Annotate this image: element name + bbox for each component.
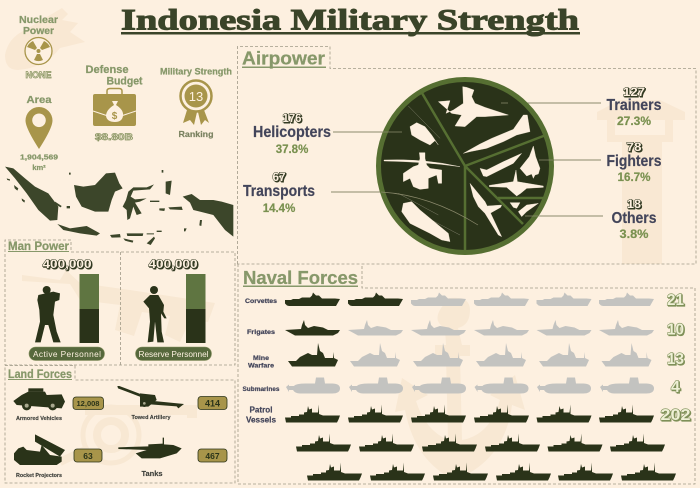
title: Indonesia Military Strength — [121, 4, 579, 36]
stat: others: 18 — [627, 197, 641, 211]
stat: helicopters: Helicopters — [253, 124, 331, 141]
panel: defense budget — [86, 64, 143, 142]
icon: rocket projector — [14, 434, 65, 465]
value badge: rocket projectors — [74, 449, 102, 462]
pie aircraft: silhouettes — [384, 87, 543, 242]
pie arrows — [381, 103, 553, 225]
panel: area: 1,904,569 — [20, 152, 58, 162]
panel: military strength ranking: Ranking — [178, 129, 214, 139]
row: corvettes — [245, 292, 686, 307]
panel: defense budget: Defense — [86, 64, 128, 76]
row: patrol vessels: Patrol — [250, 406, 272, 414]
stat: transports: 14.4% — [263, 203, 295, 215]
leader lines — [331, 103, 603, 216]
value badge: armored vehicles — [73, 397, 104, 410]
row: submarines — [242, 378, 682, 394]
panel: land forces: Towed Artillery — [132, 415, 171, 421]
row: frigates: 10 — [667, 322, 684, 338]
panel: nuclear power: NONE — [26, 70, 52, 80]
icon: medal: 13 — [189, 89, 203, 104]
panel: man power — [5, 239, 235, 365]
panel: man power: 400,000 — [42, 257, 92, 271]
bar: active personnel — [80, 274, 99, 343]
panel: area: km² — [32, 163, 46, 172]
row: patrol vessels: Vessels — [246, 416, 277, 424]
heading: man power: Man Power — [8, 239, 69, 253]
panel: area: Area — [26, 94, 52, 106]
stat: fighters — [606, 140, 662, 184]
stat: transports: Transports — [243, 183, 315, 200]
value badge: towed artillery — [198, 396, 227, 410]
row: frigates: Frigates — [247, 329, 275, 336]
heading: naval forces: Naval Forces — [243, 268, 358, 288]
panel: land forces — [5, 366, 235, 483]
stat: others: Others — [612, 210, 656, 227]
stat: trainers: Trainers — [606, 97, 662, 114]
stat: fighters: Fighters — [606, 153, 662, 170]
stat: fighters: 78 — [626, 140, 642, 154]
stat: transports — [243, 170, 315, 215]
stat: fighters: 16.7% — [618, 172, 650, 184]
row: submarines: 4 — [671, 379, 680, 396]
stat: helicopters: 37.8% — [276, 144, 308, 156]
panel: nuclear power: Power — [23, 26, 54, 37]
panel: nuclear power: Nuclear — [19, 15, 58, 26]
row: corvettes: Corvettes — [245, 298, 277, 305]
icon: towed artillery — [117, 386, 184, 408]
icon: radiation symbol — [25, 38, 52, 64]
bar: reserve personnel — [186, 274, 206, 343]
stat: others: 3.8% — [620, 229, 648, 241]
label: reserve personnel — [136, 347, 212, 360]
panel: land forces: Armored Vehicles — [16, 416, 62, 422]
row: submarines: Submarines — [242, 386, 280, 393]
panel: nuclear power — [19, 15, 58, 80]
watermark: cannon wheel — [60, 407, 192, 463]
stat: others — [612, 197, 656, 241]
row: mine warfare: Mine — [253, 355, 269, 362]
stat: trainers: 127 — [623, 85, 645, 99]
watermark: bomb — [5, 8, 85, 70]
panel: area — [20, 94, 58, 172]
panel: military strength ranking: Military Strength — [160, 66, 232, 76]
row: mine warfare: Warfare — [248, 362, 274, 370]
watermark: rifle — [22, 270, 215, 342]
watermark: control tower — [597, 100, 685, 264]
panel: defense budget: Budget — [106, 76, 143, 88]
value badge: tanks: 467 — [205, 451, 220, 461]
value badge: tanks — [198, 449, 227, 462]
row: patrol vessels: 202 — [660, 407, 691, 424]
pie chart: aircraft fleet — [378, 80, 553, 252]
icon: soldier active — [35, 286, 61, 342]
heading: land forces: Land Forces — [8, 369, 72, 381]
value badge: towed artillery: 414 — [205, 398, 220, 408]
icon: armored vehicle — [13, 388, 65, 410]
label: active personnel — [29, 347, 104, 360]
panel: naval forces — [238, 264, 695, 484]
row: mine warfare: 13 — [667, 351, 684, 368]
row: frigates — [247, 320, 684, 338]
heading: airpower: Airpower — [242, 48, 325, 68]
pie rotor lines — [398, 106, 460, 235]
panel: airpower — [238, 46, 696, 264]
stat: helicopters — [253, 111, 331, 156]
icon: soldier reserve — [143, 286, 167, 342]
panel: military strength ranking — [160, 66, 232, 139]
icon: briefcase with money bag: $ — [112, 111, 118, 122]
label: reserve personnel: Reserve Personnel — [138, 349, 209, 359]
row: patrol vessels — [246, 404, 691, 480]
value badge: rocket projectors: 63 — [83, 451, 93, 461]
panel: defense budget: $8.80B — [95, 132, 134, 142]
stat: transports: 67 — [272, 170, 286, 184]
icon: tank — [118, 438, 182, 458]
watermark: anchor — [395, 298, 525, 480]
map of Indonesia — [5, 167, 233, 245]
stat: trainers: 27.3% — [617, 116, 651, 128]
value badge: armored vehicles: 12,008 — [77, 399, 99, 408]
panel: man power: 400,000 — [148, 257, 198, 271]
panel: land forces: Rocket Projectors — [16, 473, 62, 479]
stat: helicopters: 176 — [282, 111, 302, 125]
stat: trainers — [606, 85, 662, 128]
panel: land forces: Tanks — [141, 469, 163, 478]
row: mine warfare — [248, 343, 684, 370]
label: active personnel: Active Personnel — [33, 349, 101, 359]
row: corvettes: 21 — [667, 292, 684, 309]
icon: location pin — [26, 107, 52, 149]
